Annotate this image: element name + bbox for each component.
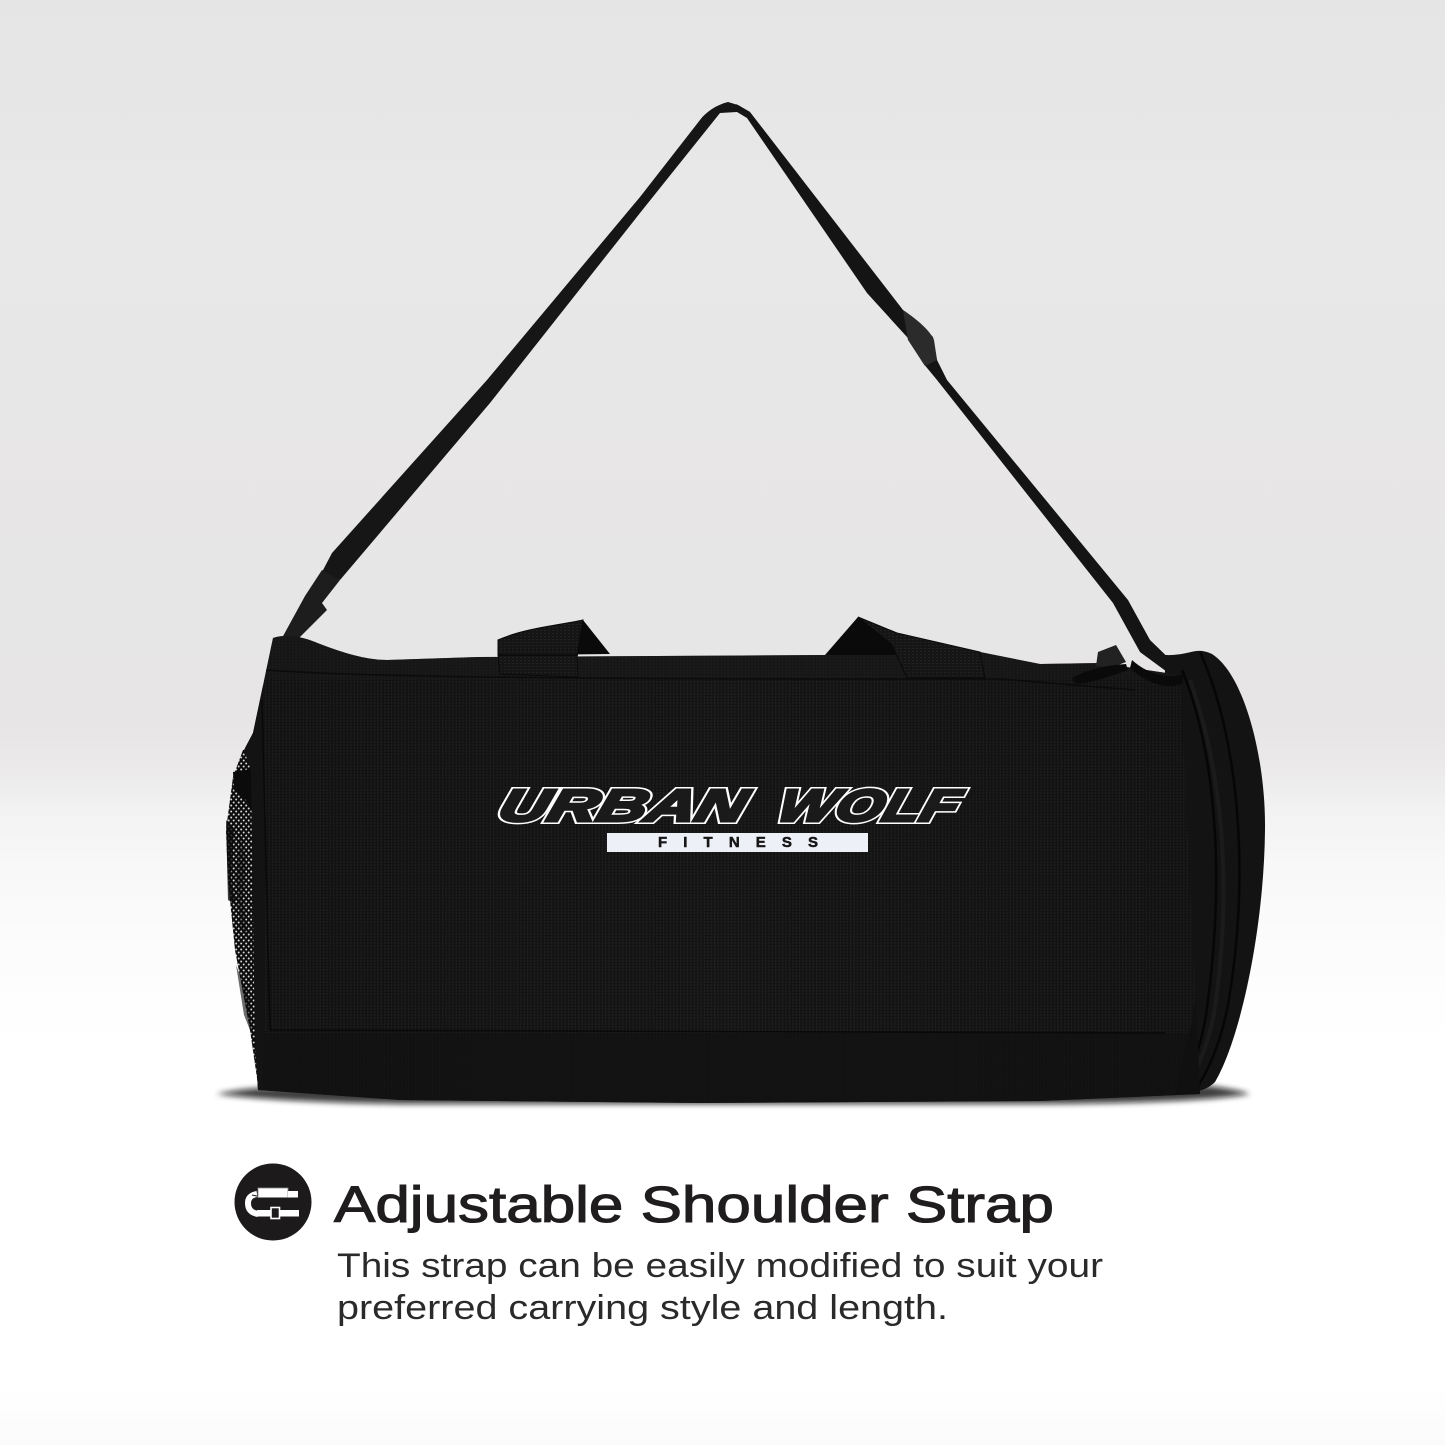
logo wordmark: URBAN (493, 780, 755, 831)
strap: right buckle (903, 310, 937, 366)
strap: left buckle (282, 570, 340, 642)
logo wordmark: WOLF (772, 780, 969, 831)
description text (337, 1247, 1103, 1327)
icon: adjustable belt strap (234, 1164, 312, 1240)
heading: Adjustable Shoulder Strap (334, 1176, 1054, 1233)
handle: right (825, 617, 985, 678)
bag logo: Urban Wolf Fitness (493, 780, 969, 852)
shoulder strap (282, 102, 1183, 680)
right end cap with zippers (1165, 651, 1265, 1094)
strap: right strand (736, 104, 1183, 680)
side mesh pocket (226, 750, 275, 1085)
floor shadow under bag (216, 1086, 1250, 1104)
logo wordmark: URBAN (493, 780, 755, 831)
duffel bag product illustration (226, 102, 1265, 1105)
logo wordmark: WOLF (772, 780, 969, 831)
logo subtitle: FITNESS (658, 834, 818, 851)
description text: This strap can be easily modified to suit your (337, 1247, 1103, 1285)
description text: preferred carrying style and length. (337, 1289, 948, 1327)
strap: left strand (322, 102, 750, 580)
logo wordmark (493, 780, 969, 831)
logo bar (607, 833, 868, 852)
zipper pulls (1072, 645, 1184, 686)
bag body (244, 630, 1210, 1105)
handle: left (498, 620, 610, 677)
